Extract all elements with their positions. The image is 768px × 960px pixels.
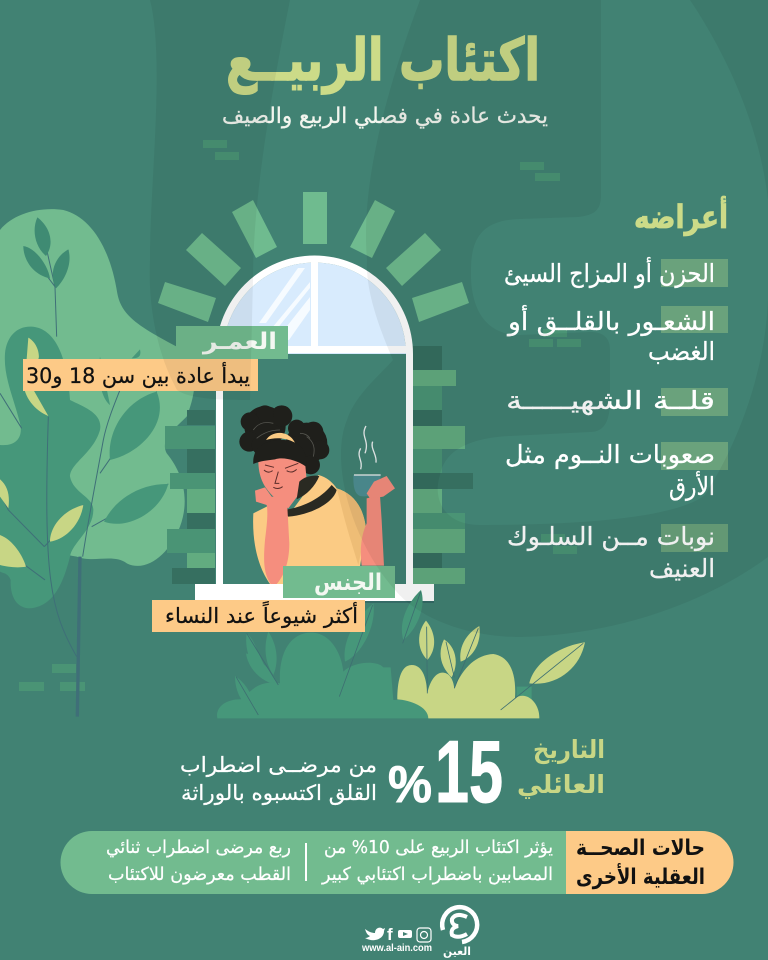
leaves (23, 217, 70, 288)
highlights (661, 259, 728, 552)
symptom list: الأرق (669, 470, 715, 501)
dark blob (0, 327, 100, 608)
glass (223, 262, 406, 354)
symptom list (504, 256, 715, 583)
reflections (259, 268, 310, 340)
panel: other mental health conditions (61, 831, 734, 894)
hair (239, 405, 329, 474)
window (216, 255, 413, 584)
statistic: family history: القلق اكتسبوه بالوراثة (181, 781, 377, 805)
callout: gender: الجنس (314, 570, 382, 596)
decorative bricks (19, 140, 581, 691)
callout: age: العمـر (202, 329, 277, 355)
frame (216, 255, 413, 584)
percent sign: % (388, 756, 432, 814)
neck and face (258, 458, 307, 508)
title: اكتئاب الربيــع (226, 26, 540, 95)
logo and social: العين (443, 945, 471, 958)
symptom list: الحزن أو المزاج السيئ (504, 256, 715, 289)
icon: facebook: f (387, 925, 393, 944)
bricks around window (165, 346, 473, 584)
callout: age (23, 326, 288, 391)
yellow bush (397, 654, 539, 718)
symptom list: الشعـور بالقلــق أو (506, 304, 715, 337)
eyes and face lines (264, 463, 298, 489)
statistic: family history (180, 722, 605, 821)
plants left (0, 209, 195, 717)
headband (266, 433, 295, 443)
steam (359, 426, 376, 469)
fringe (253, 440, 306, 467)
left arm (255, 487, 289, 584)
symptom list: صعوبات النــوم مثل (505, 440, 715, 469)
back leaves (235, 590, 423, 715)
big number: 15 (435, 722, 503, 821)
window pane (223, 353, 406, 584)
icon: Al-Ain logo (442, 907, 477, 942)
statistic: family history: التاريخ (533, 735, 605, 765)
icon: youtube (398, 930, 412, 938)
hand (367, 476, 395, 498)
yellow leaves (419, 621, 585, 684)
statistic: family history: من مرضــى اضطراب (180, 753, 377, 777)
heading: أعراضه (634, 196, 728, 236)
symptom list: قلــة الشهيـــــة (506, 386, 715, 416)
panel: other mental health conditions: يؤثر اكتئاب الربيع على 10% من (324, 837, 553, 858)
watermark overlay (150, 0, 768, 637)
symptom list: العنيف (649, 554, 715, 583)
callout: age: يبدأ عادة بين سن 18 و30 (26, 362, 250, 388)
symptom list: نوبات مــن السلـوك (507, 522, 715, 551)
panel: other mental health conditions: القطب معرضون للاكتئاب (108, 864, 291, 885)
cup (353, 475, 381, 496)
icon: twitter (365, 928, 385, 940)
panel: symptoms (504, 196, 728, 583)
panel: other mental health conditions: المصابين باضطراب اكتئابي كبير (321, 864, 553, 885)
statistic: family history: العائلي (517, 770, 605, 799)
right arm (361, 495, 384, 566)
website: www.al-ain.com (361, 943, 432, 954)
sweater (253, 475, 366, 584)
subtitle: يحدث عادة في فصلي الربيع والصيف (222, 104, 548, 129)
rays (158, 192, 469, 322)
branches (0, 220, 168, 717)
collar (268, 476, 337, 517)
logo and social (361, 907, 477, 958)
stems (236, 592, 583, 715)
light blob (0, 209, 195, 566)
panel: other mental health conditions: ربع مرضى اضطراب ثنائي (106, 837, 291, 858)
symptom list: الغضب (648, 337, 715, 366)
green bush (217, 633, 428, 718)
bushes (217, 590, 585, 718)
panel: other mental health conditions: حالات الصحــة (576, 836, 705, 861)
icon: instagram (417, 928, 431, 942)
curl lines (253, 422, 314, 457)
window sill (195, 584, 434, 601)
callout: gender (152, 566, 395, 632)
panel: other mental health conditions: العقلية الأخرى (576, 862, 705, 890)
woman (239, 405, 395, 584)
callout: gender: أكثر شيوعاً عند النساء (165, 600, 358, 628)
title (222, 26, 548, 129)
